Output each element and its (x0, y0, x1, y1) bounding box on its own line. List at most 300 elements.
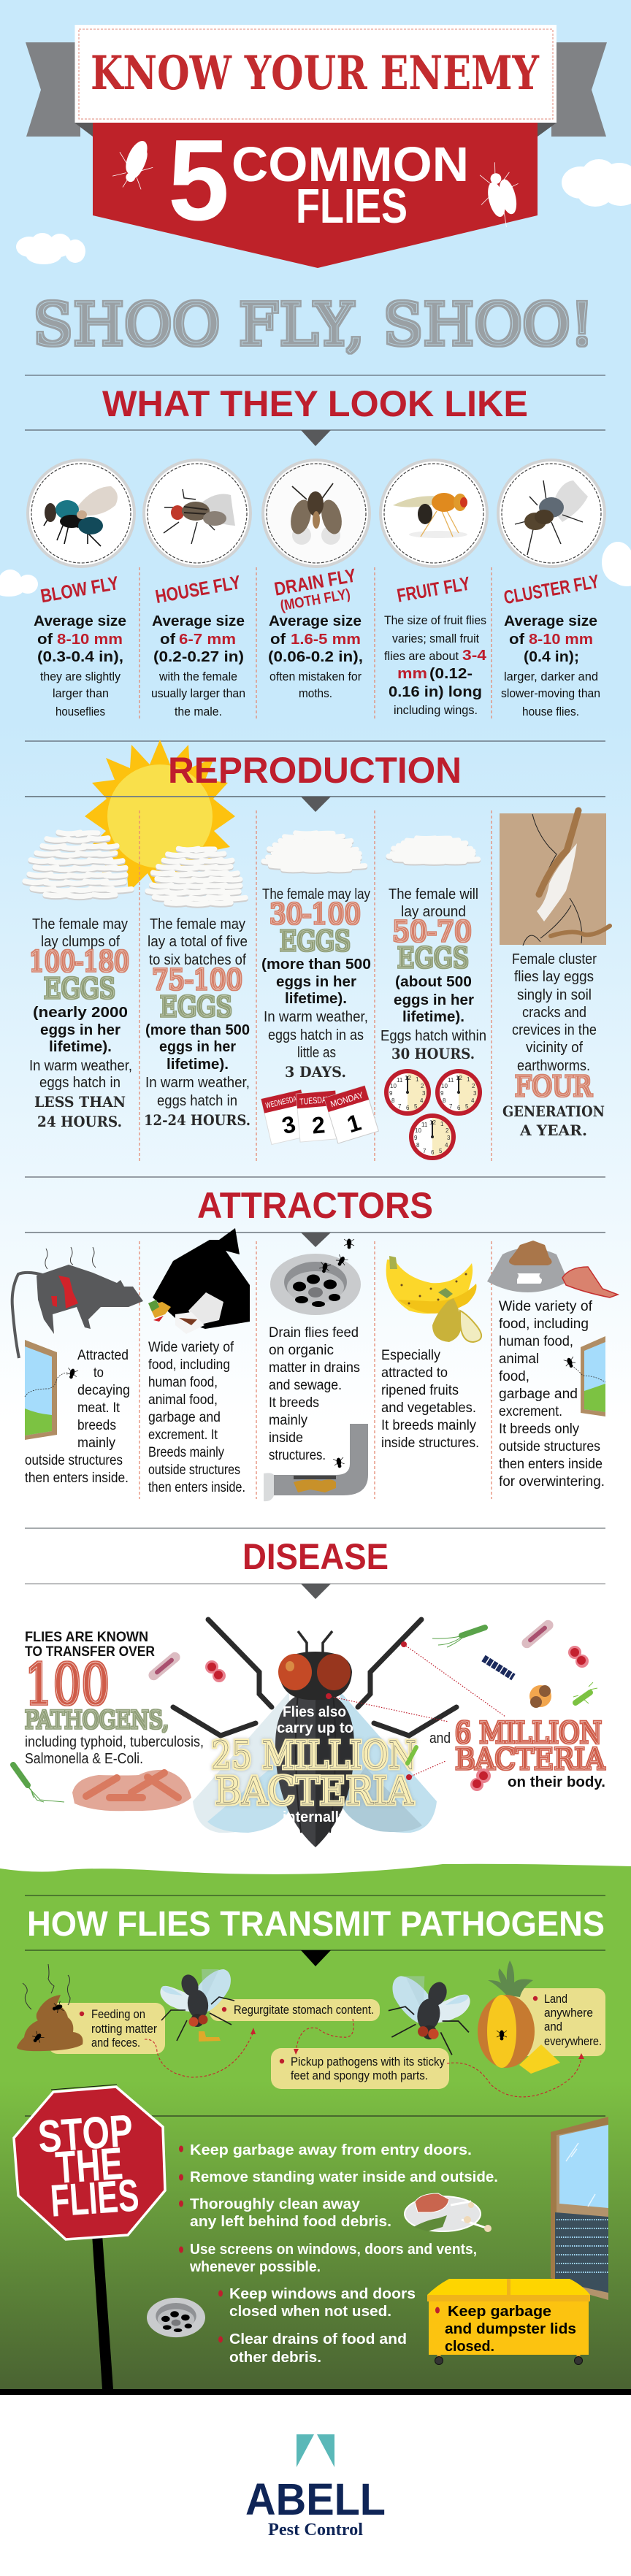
attractors text: carcass (25, 1348, 130, 1486)
calendar: monday: 1 (344, 1109, 364, 1138)
ribbon tails (26, 42, 80, 137)
column one: reproduction text: LESS THAN (34, 1093, 126, 1111)
dashed flow arrows (145, 2019, 581, 2097)
green lawn background (0, 1864, 631, 2389)
prevention bullet: standing water: Remove standing water inside and outside. (190, 2169, 498, 2185)
fruit fly size text: 0.16 in) long (389, 684, 482, 700)
callout dots and lines (326, 1641, 412, 1780)
prevention bullet: garbage doors: Keep garbage away from entry doors. (190, 2142, 472, 2158)
arrow: what they look like (301, 430, 331, 446)
arrow: reproduction (301, 797, 331, 812)
stop sign (14, 2085, 165, 2239)
column five: reproduction text (502, 951, 605, 1139)
house fly size text: usually larger than (151, 686, 245, 700)
disease text: center block (211, 1704, 416, 1825)
column two: reproduction text: eggs hatch in (157, 1093, 237, 1109)
attractors text: fruit: ripened fruits (381, 1383, 459, 1398)
prevention bullet: screens (179, 2242, 477, 2275)
column two: reproduction text: In warm weather, (145, 1075, 250, 1091)
attractors text: drain: and sewage. (269, 1378, 342, 1393)
house fly size text: the male. (175, 705, 222, 718)
column two: reproduction text: 12-24 HOURS. (144, 1111, 251, 1129)
bacteria (13, 1618, 597, 1811)
name: cluster fly: CLUSTER FLY (502, 570, 601, 608)
attractors text: cluster: garbage and (499, 1387, 578, 1402)
attractors text: fruit: It breeds mainly (381, 1418, 476, 1433)
step bubble: regurgitate (210, 1999, 380, 2021)
disease text: center block: 25 MILLION (211, 1734, 416, 1778)
house fly size text: Average size (152, 613, 245, 629)
disease text: right block: and (429, 1730, 451, 1747)
portrait: cluster fly (497, 459, 606, 568)
attractors text: drain: mainly (269, 1413, 307, 1428)
heading: attractors: ATTRACTORS (197, 1185, 433, 1226)
attractors text: cluster: Wide variety of (499, 1299, 593, 1314)
big fly head (279, 1652, 352, 1700)
icon: dirty plate (405, 2193, 492, 2232)
disease text: right block: on their body. (508, 1774, 605, 1790)
drain fly size text: 1.6-5 mm (291, 632, 361, 648)
column five: reproduction text: vicinity of (526, 1040, 583, 1056)
column five: reproduction text: crevices in the (512, 1022, 597, 1038)
column five: reproduction text: earthworms. (517, 1058, 590, 1074)
house fly size text: (0.2-0.27 in) (153, 649, 244, 665)
flies: FLIES (296, 179, 408, 234)
step bubble: feeding (48, 2003, 165, 2054)
column three: reproduction text: 3 DAYS. (285, 1063, 346, 1081)
portrait: fruit fly (379, 459, 489, 568)
cluster fly size text: Average size (504, 613, 597, 629)
attractors text: carcass: Attracted (77, 1348, 129, 1363)
calendar: tuesday: TUESDAY (299, 1094, 331, 1107)
bacterium: brown cocci (529, 1685, 551, 1708)
attractors text: garbage: Wide variety of (148, 1340, 234, 1355)
column two: reproduction text: lifetime). (167, 1057, 229, 1073)
house fly size text: of (160, 632, 175, 648)
bacterium: red left (205, 1660, 226, 1682)
icon: pineapple (478, 1960, 560, 2074)
step bubble: land: everywhere. (544, 2034, 602, 2048)
column five: reproduction text: Female cluster (512, 951, 597, 967)
column four: reproduction text: lifetime). (402, 1009, 464, 1025)
prevention bullet: clear drains: other debris. (229, 2350, 321, 2366)
step bubble: feeding: and feces. (91, 2036, 140, 2050)
fruit fly size text (384, 613, 487, 717)
column five: reproduction text: FOUR (515, 1070, 592, 1103)
attractors text: cluster: animal (499, 1352, 539, 1367)
name: fruit fly: FRUIT FLY (395, 572, 472, 607)
disease text: left block: PATHOGENS, (25, 1706, 169, 1735)
icon: clocks (384, 1069, 482, 1160)
fruit fly size text: The size of fruit flies (384, 613, 486, 627)
column one: reproduction text: 100-180 (29, 946, 129, 978)
attractors text: carcass: breeds (77, 1418, 116, 1433)
blow fly size text: houseflies (56, 705, 105, 718)
cluster fly size text: house flies. (522, 705, 579, 718)
dumpster text: and dumpster lids (445, 2321, 576, 2337)
attractors text: garbage (148, 1340, 245, 1495)
bacterium: pill top right (520, 1618, 555, 1650)
column five: reproduction text: singly in soil (517, 987, 592, 1003)
arrowheads (251, 2028, 584, 2059)
blow fly size text: of (37, 632, 53, 648)
dumpster text (435, 2304, 576, 2355)
drain fly size text: moths. (299, 686, 332, 700)
cloud: left of banner (16, 233, 85, 264)
column one: reproduction text: EGGS (44, 973, 115, 1005)
bacterium: blue chain (483, 1658, 513, 1677)
attractors text: drain: on organic (269, 1343, 334, 1358)
fruit fly size text: (0.12- (429, 666, 473, 682)
column one: reproduction text: eggs hatch in (39, 1075, 121, 1091)
attractors text: cluster: human food, (499, 1334, 573, 1349)
attractors text: drain: Drain flies feed (269, 1325, 359, 1341)
portrait: house fly (142, 459, 252, 568)
drain fly size text: (0.06-0.2 in), (268, 649, 363, 665)
stop sign text: STOP (37, 2106, 134, 2163)
big fly diagram (173, 1619, 505, 1847)
bacterium: red low (470, 1768, 491, 1791)
house fly size text (151, 613, 245, 718)
attractors text: cluster: outside structures (499, 1439, 600, 1454)
icon: drain with flies (270, 1238, 361, 1315)
bacterium: green flagella top (432, 1628, 485, 1647)
attractors text: garbage: animal food, (148, 1392, 218, 1408)
fruit fly size text: varies; small fruit (392, 632, 479, 645)
name: moth fly: (MOTH FLY) (279, 586, 351, 614)
attractors text: drain: inside (269, 1430, 303, 1446)
disease text: center block: BACTERIA (215, 1770, 414, 1814)
icon: window right (564, 1336, 605, 1417)
bacterium: red right (568, 1646, 589, 1668)
attractors text: garbage: then enters inside. (148, 1480, 245, 1495)
drain fly size text: often mistaken for (269, 670, 362, 683)
slogan: SHOO FLY, SHOO! (33, 291, 594, 359)
attractors text: fruit: Especially (381, 1348, 440, 1363)
big fly wings (193, 1692, 289, 1833)
column one: reproduction text: The female may (32, 916, 128, 932)
column two: reproduction text: to six batches of (149, 952, 246, 968)
cluster fly size text (501, 613, 600, 718)
attractors text: carcass: to (93, 1365, 104, 1381)
arrow: attractors (301, 1233, 331, 1247)
eggs: pile three (264, 833, 365, 871)
column four: reproduction text: EGGS (397, 942, 469, 974)
white footer (0, 2395, 631, 2576)
heading: disease: DISEASE (242, 1536, 389, 1577)
eggs: pile four (389, 838, 478, 863)
prevention bullet: food debris (179, 2196, 391, 2230)
icon: fly with pathogens (389, 1976, 470, 2055)
attractors text: fruit (381, 1348, 479, 1451)
blow fly size text (34, 613, 126, 718)
column one: reproduction text: (nearly 2000 (33, 1005, 128, 1021)
column three: reproduction text: eggs in her (276, 974, 356, 990)
cloud: left of blow fly (0, 570, 38, 597)
dumpster text: Keep garbage (448, 2304, 551, 2320)
icon: garbage bag (148, 1228, 250, 1334)
stop sign post (92, 2234, 113, 2389)
column five: reproduction text: GENERATION (502, 1103, 605, 1120)
column one: reproduction text: eggs in her (40, 1022, 121, 1038)
attractors text: drain: It breeds (269, 1395, 319, 1411)
disease text: center block: Flies also (283, 1704, 346, 1720)
cloud: right of banner (562, 159, 631, 207)
attractors text: cluster: It breeds only (499, 1422, 579, 1437)
calendar: wednesday: 3 (280, 1111, 298, 1139)
heading: reproduction: REPRODUCTION (168, 750, 462, 791)
calendar: wednesday: WEDNESDAY (265, 1094, 301, 1111)
column five: reproduction text: cracks and (522, 1005, 586, 1021)
icon: window left (25, 1340, 78, 1440)
fruit fly size text: mm (397, 666, 427, 682)
column separators: what they look like (139, 567, 492, 719)
calendar: monday: MONDAY (329, 1089, 364, 1109)
bacterium: green on fly (408, 1747, 416, 1763)
column two: reproduction text (144, 916, 251, 1129)
column two: reproduction text: 75-100 (152, 964, 242, 996)
cluster fly size text: (0.4 in); (524, 649, 579, 665)
prevention bullet: windows closed: closed when not used. (229, 2304, 391, 2320)
portrait: blow fly (26, 459, 136, 568)
stop sign text: THE (54, 2139, 124, 2193)
column five: reproduction text: flies lay eggs (514, 969, 594, 985)
prevention bullet: windows closed (218, 2286, 416, 2320)
prevention bullet: windows closed: Keep windows and doors (229, 2286, 416, 2302)
column three: reproduction text: lifetime). (285, 991, 347, 1007)
step bubble: land: and (544, 2020, 562, 2033)
column four: reproduction text: eggs in her (394, 992, 474, 1008)
column two: reproduction text: (more than 500 (145, 1022, 250, 1038)
prevention bullet: screens: Use screens on windows, doors and vents, (190, 2242, 477, 2258)
drain fly size text: Average size (269, 613, 362, 629)
cluster fly size text: larger, darker and (504, 670, 598, 683)
attractors text: fruit: and vegetables. (381, 1400, 476, 1416)
calendar: tuesday (296, 1091, 340, 1142)
disease text: right block: 6 MILLION (455, 1717, 602, 1750)
step bubble: pickup: Pickup pathogens with its sticky (291, 2055, 445, 2069)
column four: reproduction text: lay around (401, 904, 466, 920)
dumpster text: closed. (445, 2339, 494, 2355)
prevention bullet: food debris: Thoroughly clean away (190, 2196, 361, 2212)
name: house fly: HOUSE FLY (153, 571, 242, 607)
heading: how flies transmit pathogens: HOW FLIES TRANSMIT PATHOGENS (27, 1905, 605, 1944)
fruit fly size text: including wings. (394, 703, 478, 717)
portrait: drain fly (261, 459, 371, 568)
cluster fly size text: slower-moving than (501, 686, 600, 700)
step bubble: feeding: Feeding on (91, 2007, 145, 2021)
name: blow fly: BLOW FLY (39, 572, 121, 607)
attractors text: garbage: food, including (148, 1357, 230, 1373)
disease text: left block: TO TRANSFER OVER (25, 1644, 155, 1660)
blow fly size text: 8-10 mm (57, 632, 123, 648)
disease text: center block: internally (283, 1809, 348, 1825)
logo: abell pest control (245, 2434, 386, 2539)
black ground band (0, 2389, 631, 2395)
disease text: left block (25, 1630, 204, 1767)
icon: bananas and pear (386, 1256, 481, 1342)
title ribbon (26, 25, 607, 137)
fly portraits (26, 459, 606, 568)
window with screen (551, 2117, 608, 2300)
arrow: transmit (301, 1950, 331, 1966)
attractors text: carcass: decaying (77, 1383, 130, 1398)
blow fly size text: Average size (34, 613, 126, 629)
column separators: reproduction (139, 810, 492, 1162)
icon: clean drain (147, 2298, 205, 2337)
drain fly size text: of (270, 632, 286, 648)
blow fly size text: (0.3-0.4 in), (37, 649, 123, 665)
icon: pet bowl and meat (487, 1241, 618, 1297)
prevention bullet: screens: whenever possible. (189, 2259, 321, 2275)
attractors text: cluster: food, (499, 1369, 529, 1384)
icon: dead rat (12, 1247, 143, 1358)
attractors text: carcass: mainly (77, 1435, 115, 1451)
blow fly size text: they are slightly (40, 670, 121, 683)
column three: reproduction text: (more than 500 (261, 957, 371, 973)
eggs: pile one (25, 832, 131, 898)
column three: reproduction text: In warm weather, (264, 1009, 368, 1025)
disease text: right block (429, 1717, 605, 1790)
calendar: tuesday: 2 (311, 1111, 326, 1139)
column four: reproduction text: Eggs hatch within (380, 1028, 486, 1044)
disease text: left block: 100 (25, 1652, 110, 1718)
drain fly size text (268, 613, 363, 700)
attractors text: fruit: attracted to (381, 1365, 448, 1381)
column three: reproduction text: eggs hatch in as (268, 1027, 364, 1043)
attractors text: garbage: garbage and (148, 1410, 221, 1425)
column four: reproduction text: The female will (389, 886, 478, 902)
column two: reproduction text: The female may (150, 916, 245, 932)
prevention bullet: food debris: any left behind food debris. (190, 2214, 391, 2230)
logo wordmark: ABELL (245, 2475, 386, 2524)
column two: reproduction text: lay a total of five (148, 934, 248, 950)
icon: fly regurgitating (160, 1969, 234, 2042)
bacterium: green flagella left (13, 1765, 64, 1802)
bacterium: salmon culture (72, 1770, 191, 1811)
house fly size text: 6-7 mm (179, 632, 236, 648)
bacterium: pill left (147, 1650, 182, 1682)
column separators: attractors (139, 1241, 492, 1499)
disease text: center block: carry up to (277, 1720, 353, 1736)
logo tagline: Pest Control (268, 2521, 363, 2539)
attractors text: garbage: human food, (148, 1375, 218, 1390)
big fly body (275, 1690, 316, 1847)
icon: dumpster (427, 2279, 590, 2364)
common: COMMON (232, 137, 469, 192)
column four: reproduction text: (about 500 (395, 974, 472, 990)
attractors text: carcass: meat. It (77, 1400, 121, 1416)
eggs: pile two (148, 848, 245, 905)
attractors text: garbage: Breeds mainly (148, 1445, 224, 1460)
attractors text: cluster: food, including (499, 1316, 589, 1332)
prevention bullet: clear drains (218, 2331, 407, 2366)
column four: reproduction text (380, 886, 486, 1062)
column four: reproduction text: 30 HOURS. (391, 1045, 475, 1062)
step bubble: land: anywhere (544, 2006, 593, 2020)
arrow: disease (301, 1584, 331, 1599)
stop sign text (37, 2106, 140, 2227)
fruit fly size text: flies are about (384, 649, 459, 663)
icon: white fly right (472, 158, 528, 231)
attractors text: fruit: inside structures. (381, 1435, 479, 1451)
white title plate (74, 25, 557, 123)
cluster fly size text: 8-10 mm (529, 632, 593, 648)
logo mark (297, 2434, 334, 2467)
red banner (93, 116, 538, 268)
attractors text: drain: structures. (269, 1448, 326, 1463)
column three: reproduction text (261, 886, 371, 1081)
column one: reproduction text: lay clumps of (41, 934, 120, 950)
icon: sun (85, 740, 235, 895)
fruit fly size text: 3-4 (462, 648, 487, 664)
attractors text: garbage: excrement. It (148, 1427, 218, 1443)
icon: clogged pipe (264, 1424, 368, 1501)
disease text: left block: FLIES ARE KNOWN (25, 1630, 148, 1645)
column four: reproduction text: 50-70 (392, 916, 472, 948)
column three: reproduction text: little as (297, 1045, 336, 1061)
icon: calendar pages (261, 1086, 378, 1144)
column five: reproduction text: A YEAR. (519, 1122, 587, 1139)
attractors text: garbage: outside structures (148, 1463, 240, 1478)
cloud: right of cluster fly (602, 542, 631, 586)
disease text: left block: Salmonella & E-Coli. (25, 1751, 143, 1767)
bacterium: green hairy (573, 1682, 597, 1703)
attractors text: cluster: then enters inside (499, 1457, 603, 1472)
calendar: wednesday (261, 1090, 311, 1144)
prevention bullet: clear drains: Clear drains of food and (229, 2331, 407, 2347)
column two: reproduction text: eggs in her (159, 1039, 236, 1055)
attractors text: carcass: outside structures (25, 1453, 123, 1468)
icon: poop with flies (17, 1964, 83, 2051)
column three: reproduction text: EGGS (280, 925, 351, 957)
name: drain fly: DRAIN FLY (272, 564, 358, 600)
attractors text: cluster: excrement. (499, 1404, 562, 1419)
column three: reproduction text: The female may lay (262, 886, 370, 902)
step bubble: regurgitate: Regurgitate stomach content. (234, 2003, 374, 2017)
icon: white fly left (107, 134, 161, 195)
attractors text: drain (269, 1325, 360, 1463)
column three: reproduction text: 30-100 (269, 898, 361, 930)
big fly legs (173, 1619, 456, 1736)
cluster fly size text: of (509, 632, 524, 648)
heading: what they look like: WHAT THEY LOOK LIKE (102, 383, 528, 424)
step bubble: pickup (271, 2048, 449, 2089)
step bubble: pickup: feet and spongy moth parts. (291, 2069, 428, 2082)
column one: reproduction text: 24 HOURS. (37, 1113, 122, 1130)
step bubble: feeding: rotting matter (91, 2022, 157, 2036)
stop sign text: FLIES (49, 2170, 140, 2227)
blow fly size text: larger than (53, 686, 109, 700)
picture: earthworm crack with eggs (500, 810, 610, 946)
attractors text: cluster: for overwintering. (499, 1474, 605, 1490)
calendar: monday (324, 1086, 378, 1143)
column two: reproduction text: EGGS (160, 991, 232, 1023)
attractors text: drain: matter in drains (269, 1360, 360, 1376)
column one: reproduction text: In warm weather, (29, 1058, 132, 1074)
house fly size text: with the female (158, 670, 237, 683)
column one: reproduction text: lifetime). (49, 1039, 112, 1055)
fly names (39, 564, 601, 614)
disease text: right block: BACTERIA (455, 1743, 605, 1776)
disease text: left block: including typhoid, tuberculosis, (25, 1734, 204, 1750)
big five: 5 (168, 116, 229, 245)
step bubble: land (511, 1988, 605, 2056)
attractors text: carcass: then enters inside. (25, 1471, 129, 1486)
attractors text: cluster (499, 1299, 605, 1490)
step bubble: land: Land (544, 1992, 567, 2006)
column one: reproduction text (29, 916, 132, 1130)
